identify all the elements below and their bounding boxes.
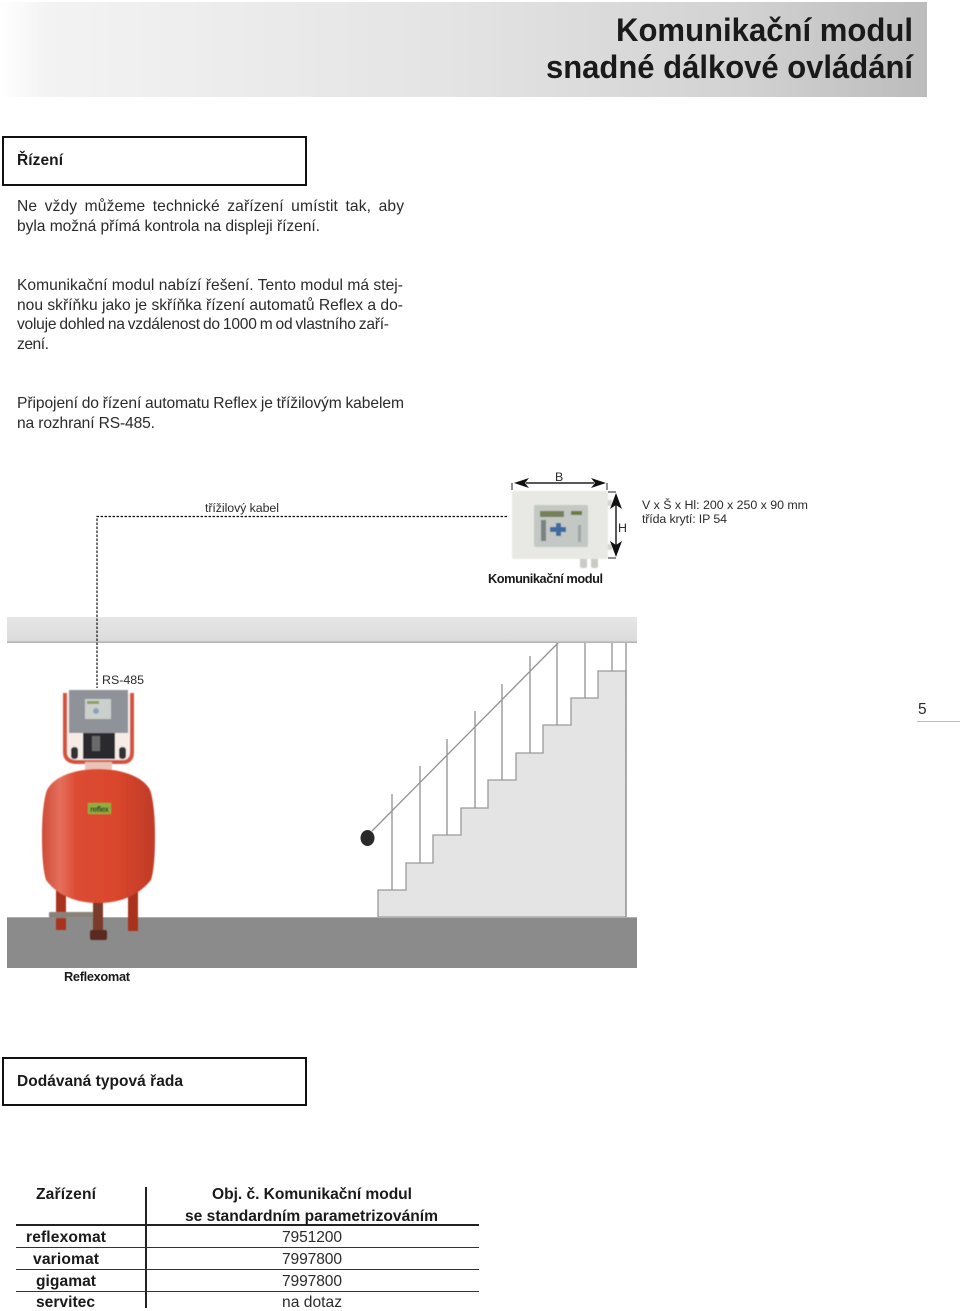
text block: solution: zení. (17, 336, 49, 353)
text block: solution: Komunikační modul nabízí řešení. Tento modul má stej- (17, 277, 403, 294)
Reflexomat label: Reflexomat (64, 969, 131, 984)
control frame (65, 693, 132, 762)
title (546, 12, 914, 85)
dimension H: H (618, 521, 627, 535)
connecting pipes (85, 762, 112, 771)
table header (36, 1186, 438, 1225)
row: reflexomat: 7951200 (282, 1229, 342, 1246)
reflex logo (88, 803, 111, 814)
table header: Obj. č. Komunikační modul (212, 1186, 412, 1203)
row: reflexomat (26, 1229, 342, 1246)
row: servitec: na dotaz (282, 1294, 342, 1311)
panel (534, 505, 588, 547)
text block: solution (17, 277, 403, 353)
row: variomat: 7997800 (282, 1251, 342, 1268)
row: reflexomat: reflexomat (26, 1229, 106, 1246)
title: snadné dálkové ovládání (546, 49, 914, 85)
header band (0, 2, 927, 97)
centre foot (90, 893, 107, 940)
page number: 5 (918, 701, 927, 718)
dimension B: B (555, 470, 563, 484)
row: gigamat: gigamat (36, 1273, 96, 1290)
product table (16, 1186, 479, 1311)
communication module photo (512, 491, 612, 568)
heading box: Dodávaná typová řada: Dodávaná typová řada (17, 1073, 183, 1090)
module label: Komunikační modul (488, 571, 603, 586)
text block: intro (17, 197, 404, 235)
module specifications (642, 497, 808, 526)
cable label: třížilový kabel (205, 501, 279, 515)
table header: Zařízení (36, 1186, 97, 1203)
table header: se standardním parametrizováním (185, 1208, 438, 1225)
enclosure (512, 491, 608, 559)
row: variomat (33, 1251, 342, 1268)
dashed cable (97, 516, 507, 688)
floor (7, 917, 637, 968)
glands (580, 558, 587, 568)
title: Komunikační modul (616, 12, 913, 48)
text block: connection: na rozhraní RS-485. (17, 415, 155, 432)
screen (540, 511, 564, 517)
text block: intro: byla možná přímá kontrola na displeji řízení. (17, 218, 320, 235)
text block: intro: Ne vždy můžeme technické zařízení umístit tak, aby (17, 197, 404, 215)
text block: solution: nou skříňku jako je skříňka řízení automatů Reflex a do- (17, 296, 403, 314)
text block: connection (17, 395, 404, 432)
row: gigamat (36, 1273, 342, 1290)
page number (917, 701, 960, 722)
dimension B (512, 470, 607, 490)
reflex logo: reflex (90, 805, 110, 814)
row: servitec (36, 1294, 342, 1311)
control cabinet (69, 690, 128, 733)
module specifications: V x Š x Hl: 200 x 250 x 90 mm (642, 497, 808, 512)
display panel (85, 699, 111, 719)
drain pipe (49, 912, 95, 918)
dimension H (608, 492, 627, 558)
row: servitec: servitec (36, 1294, 95, 1311)
RS-485 label: RS-485 (102, 673, 144, 687)
pump (71, 733, 126, 759)
tank body (42, 769, 155, 903)
row: variomat: variomat (33, 1251, 99, 1268)
row: gigamat: 7997800 (282, 1273, 342, 1290)
heading box: Řízení (3, 137, 306, 185)
legs (56, 888, 138, 931)
staircase (360, 643, 626, 917)
heading box: Řízení: Řízení (17, 151, 64, 169)
text block: connection: Připojení do řízení automatu Reflex je třížilovým kabelem (17, 395, 404, 412)
ceiling beam (7, 617, 637, 643)
text block: solution: voluje dohled na vzdálenost do 1000 m od vlastního zaří- (17, 316, 389, 333)
table rules (16, 1187, 479, 1308)
reflexomat unit (42, 690, 155, 940)
module specifications: třída krytí: IP 54 (642, 512, 727, 526)
keys (541, 520, 546, 541)
heading box: Dodávaná typová řada (3, 1058, 306, 1105)
